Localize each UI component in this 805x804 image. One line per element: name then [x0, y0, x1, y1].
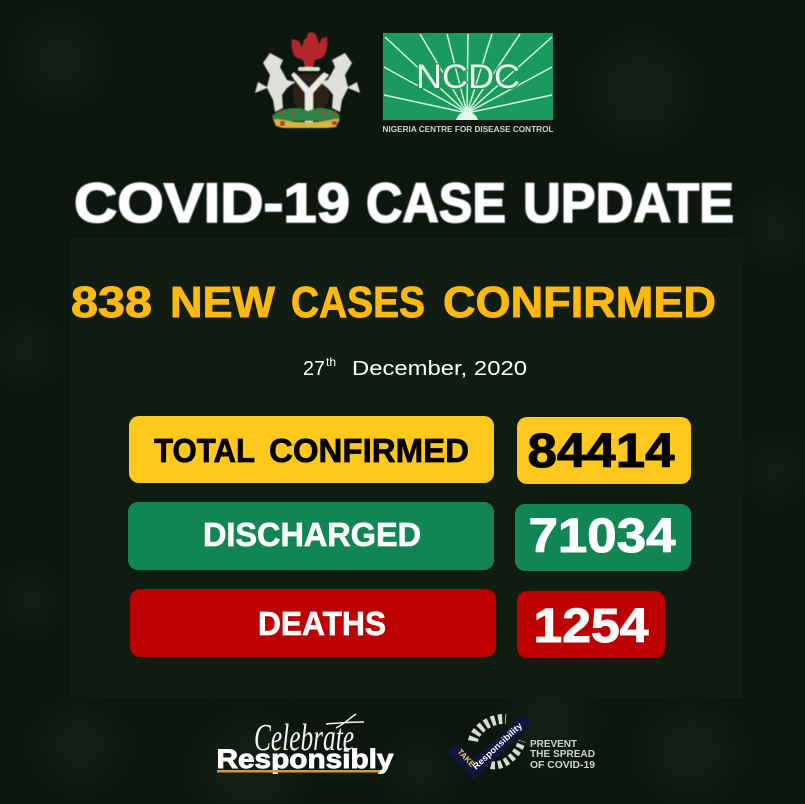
sun: [456, 112, 478, 120]
heading: new cases: CONFIRMED: [443, 278, 716, 327]
flourish: [326, 714, 364, 728]
dark content panel: [70, 238, 743, 698]
value: 71034: [528, 510, 676, 563]
badge: take responsibility: [447, 715, 595, 779]
logo: NCDC: [382, 33, 554, 134]
slogan: [530, 739, 595, 771]
icon: yellow ribbon: [273, 119, 340, 128]
heading: new cases: NEW: [170, 278, 275, 327]
value: 1254: [534, 600, 649, 653]
icon: red eagle: [292, 32, 327, 67]
icon: virus upper arc: [473, 719, 506, 741]
icon: virus lower arc: [491, 741, 522, 765]
date: th: [326, 355, 336, 369]
label: TOTAL: [154, 432, 255, 469]
label: [154, 432, 469, 469]
Responsibility: Responsibility: [471, 720, 524, 771]
label box: [130, 589, 496, 657]
label: DISCHARGED: [203, 516, 421, 553]
bold word: Responsibly: [216, 744, 394, 774]
logo: Nigerian coat of arms: [255, 32, 360, 128]
script word: Celebrate: [254, 717, 354, 759]
date: [303, 355, 527, 380]
value box: [517, 417, 691, 484]
label: DEATHS: [258, 605, 386, 642]
sunburst rays: [384, 34, 552, 113]
label box: [128, 502, 494, 570]
icon: green base: [272, 108, 340, 121]
label box: [129, 416, 494, 483]
slogan: THE SPREAD: [530, 749, 595, 760]
heading: new cases: [71, 278, 716, 327]
title: COVID-19: [74, 171, 350, 234]
slogan: OF COVID-19: [530, 760, 595, 771]
heading: new cases: 838: [71, 278, 152, 327]
title: CASE: [366, 171, 506, 234]
value: 84414: [528, 425, 675, 478]
value box: [515, 504, 691, 571]
logo: Celebrate Responsibly: [216, 714, 394, 774]
row: total confirmed: [129, 416, 691, 484]
icon: black shield: [293, 74, 329, 115]
icon: left horse: [255, 53, 295, 112]
slogan: PREVENT: [530, 739, 577, 750]
title: UPDATE: [523, 171, 734, 234]
green square: [383, 33, 553, 120]
TAKE: TAKE: [456, 747, 477, 769]
NCDC lettering: NCDC: [416, 58, 520, 96]
icon: white pall: [291, 72, 329, 123]
row: discharged: [128, 502, 691, 571]
label: CONFIRMED: [269, 432, 469, 469]
icon: right horse: [320, 53, 360, 112]
date: December, 2020: [352, 357, 527, 380]
heading: new cases: CASES: [291, 278, 425, 327]
underline: [217, 770, 380, 772]
title: [74, 171, 734, 234]
organisation name: NIGERIA CENTRE FOR DISEASE CONTROL: [382, 125, 554, 134]
checkmark: [447, 715, 531, 779]
row: deaths: [130, 589, 665, 658]
value box: [517, 591, 665, 658]
date: 27: [303, 357, 325, 380]
icon: white and green wreath: [298, 67, 320, 71]
